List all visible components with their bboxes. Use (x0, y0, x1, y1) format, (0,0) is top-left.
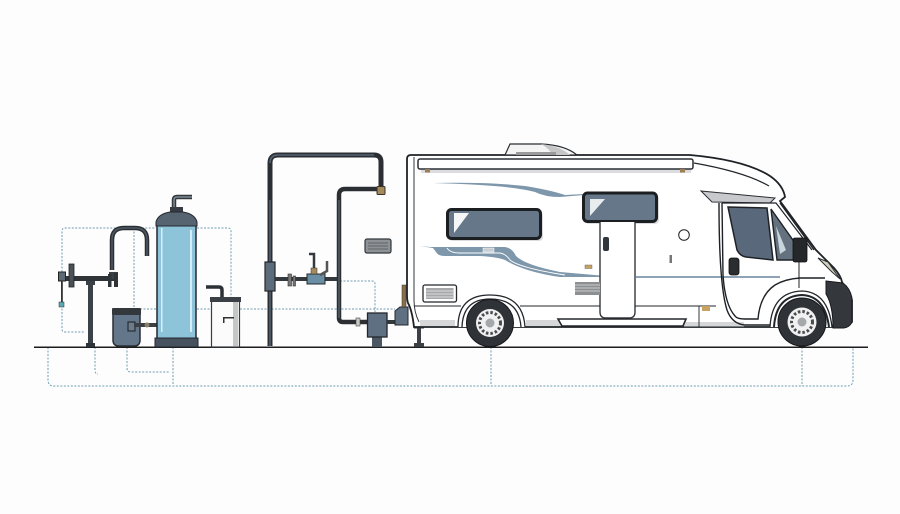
pump unit and junction box (356, 285, 408, 347)
wall vent (365, 239, 391, 253)
cab roof line (694, 163, 769, 186)
rear vent (423, 285, 456, 302)
upper swoosh (433, 183, 584, 197)
side step (558, 319, 686, 326)
wing mirror (793, 238, 807, 262)
door shut line (798, 262, 800, 288)
sill marker (702, 306, 710, 311)
front wheel (778, 298, 826, 346)
roof air conditioner (505, 144, 577, 155)
lower grey shading (420, 320, 744, 326)
water tank (155, 197, 198, 347)
entry door (600, 222, 635, 318)
decal (483, 248, 494, 252)
headlight (818, 258, 840, 279)
sun visor (701, 191, 775, 203)
cab door outline (722, 203, 825, 319)
lower swoosh (420, 246, 606, 277)
motorhome (407, 144, 852, 346)
brass fitting (377, 186, 385, 194)
door handle (729, 258, 739, 275)
belt stripe (636, 276, 780, 278)
front bumper (826, 281, 852, 328)
side window (448, 210, 543, 241)
stabiliser jack (414, 325, 424, 347)
filter canister (112, 308, 166, 346)
dashed connection lines (48, 228, 853, 386)
plumbing pipes (270, 155, 381, 346)
cab side window (728, 207, 773, 260)
faucet assembly (58, 228, 147, 347)
door window (584, 193, 659, 224)
rear wall inner line (414, 157, 419, 322)
small amber marker (585, 265, 592, 268)
body shell (407, 155, 852, 327)
small cabinet (206, 287, 241, 347)
side vent (575, 282, 600, 295)
awning (418, 159, 693, 173)
small latch (670, 255, 672, 263)
valve assembly (265, 254, 337, 291)
cab quarter window (771, 209, 795, 260)
fuel cap circle (679, 230, 689, 240)
rear wheel (466, 300, 514, 346)
front wheel arch (770, 291, 832, 327)
rear wheel arch (458, 295, 525, 327)
skirt line (414, 305, 716, 307)
ground line (34, 346, 868, 348)
